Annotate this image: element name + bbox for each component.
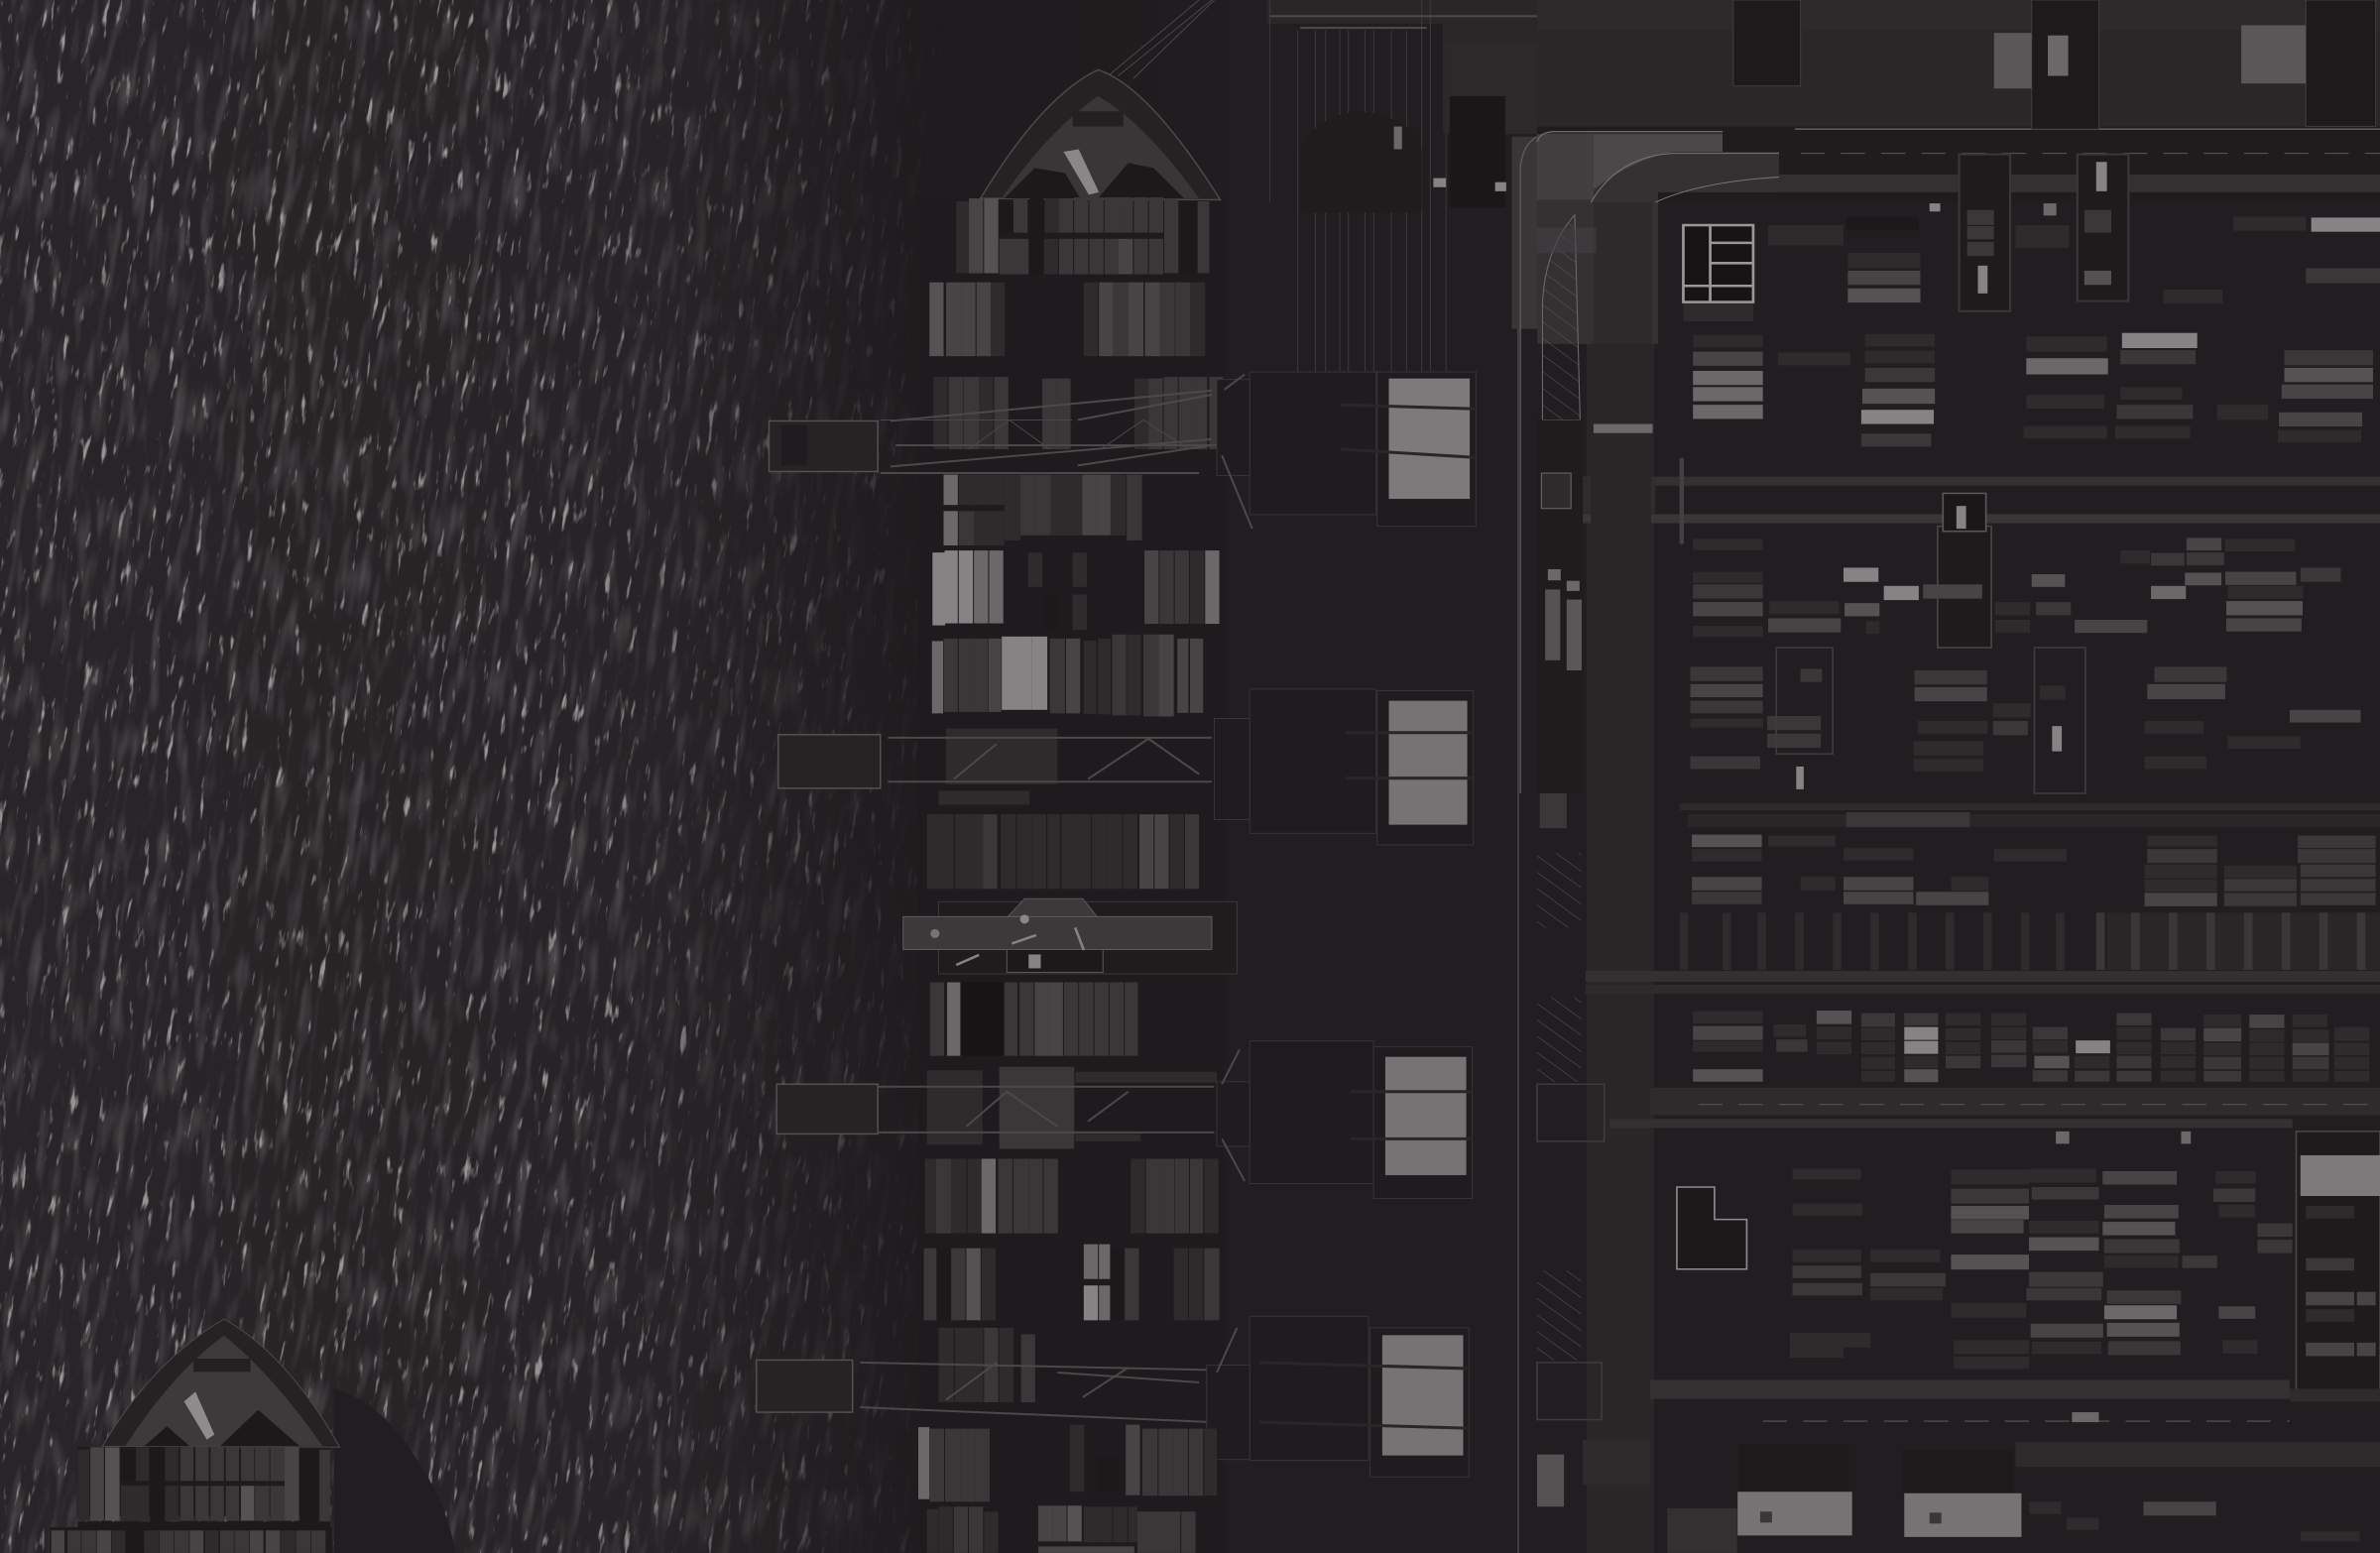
container blocks upper	[1693, 216, 2380, 447]
road bands	[1537, 344, 2380, 793]
parked trucks	[1545, 569, 1582, 670]
ship 1 and crane structures	[770, 0, 1537, 845]
white outlined building	[1683, 225, 1753, 321]
containers below crane 2	[927, 791, 1199, 889]
quay gantry legs and hatching	[1537, 793, 1605, 1506]
containers stack G and H	[918, 1425, 1217, 1553]
light pavement pad	[1537, 132, 1779, 344]
L shaped building outline	[1677, 1187, 1746, 1269]
ship 1 lower half	[757, 791, 1473, 1553]
containers stack D and E	[924, 1158, 1220, 1320]
containers below deck	[930, 983, 1137, 1056]
crane 4	[757, 1316, 1469, 1477]
ship 2 bow	[102, 1319, 340, 1447]
bottom gantry roofs	[1667, 1445, 2359, 1553]
yard gantries	[1930, 155, 2128, 311]
crane 1	[770, 372, 1476, 529]
quay and yard ground	[1230, 0, 2380, 1553]
crane 2	[778, 689, 1475, 845]
road bands and yard stripes	[1583, 774, 2380, 1553]
ship superstructure deck	[903, 898, 1237, 974]
top gantries and roads	[1537, 0, 2380, 202]
container blocks lower	[1690, 648, 2360, 793]
ship 1 containers	[929, 197, 1224, 716]
crane 3	[776, 1041, 1473, 1199]
quay lines	[1270, 0, 1537, 793]
lower yard	[1537, 774, 2380, 1553]
ship 2 containers	[52, 1447, 330, 1553]
right gantry	[2290, 1132, 2380, 1402]
ship 2	[52, 1319, 455, 1553]
container stacks lower row	[1790, 1168, 2293, 1369]
container blocks middle	[1693, 538, 2340, 637]
ship 1 bow	[981, 69, 1221, 200]
water	[0, 0, 917, 1553]
upper yard	[1537, 0, 2380, 793]
ship hulls	[50, 196, 1225, 1553]
ship 2 shadow	[334, 1388, 455, 1553]
container stacks middle row	[1693, 1011, 2369, 1082]
hatched lane	[1537, 215, 1597, 419]
container stacks top row	[1692, 835, 2376, 906]
central gantry	[1938, 493, 1991, 648]
ship 1 mooring lines	[1108, 0, 1214, 78]
